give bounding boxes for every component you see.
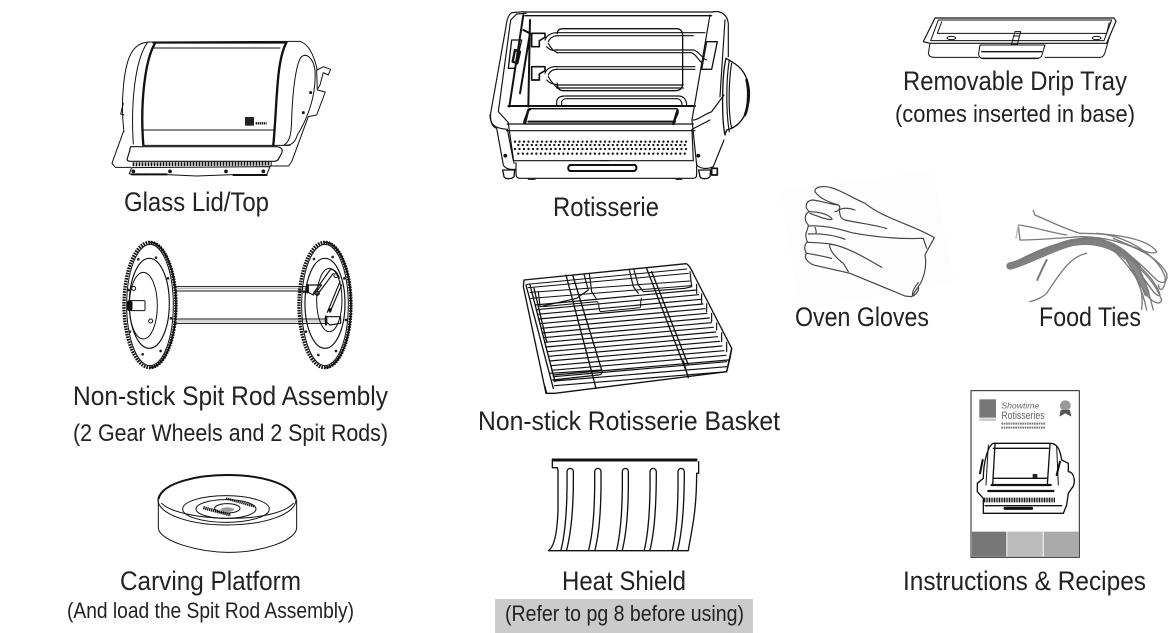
left gear wheel [124, 242, 176, 368]
right gear wheel [299, 242, 351, 368]
title: heat shield: Heat Shield [562, 566, 686, 596]
icon: oven gloves [780, 170, 955, 310]
icon: instruction booklet: Showtime [1001, 400, 1040, 410]
text: spit rod loading note: (And load the Spit Rod Assembly) [67, 598, 354, 623]
text: gear wheels and spit rods: (2 Gear Wheels and 2 Spit Rods) [73, 420, 388, 447]
title: Glass Lid/Top: Glass Lid/Top [124, 187, 269, 217]
icon: rotisserie [490, 12, 749, 179]
callout: refer to page 8 [495, 599, 753, 633]
icon: spit rod assembly [124, 242, 351, 368]
title: Oven Gloves: Oven Gloves [795, 302, 929, 332]
icon: drip tray [923, 18, 1116, 59]
callout: refer to page 8: (Refer to pg 8 before using) [505, 601, 744, 626]
icon: instruction booklet [971, 391, 1079, 557]
icon: food ties [1010, 211, 1167, 310]
icon: heat shield [548, 459, 699, 551]
title: rotisserie basket: Non-stick Rotisserie Basket [478, 406, 780, 436]
title: instructions and recipes: Instructions & Recipes [903, 566, 1146, 596]
title: spit rod assembly: Non-stick Spit Rod Assembly [73, 381, 388, 411]
title: Food Ties: Food Ties [1039, 302, 1141, 332]
icon: rotisserie basket [523, 264, 732, 393]
icon: glass lid [112, 41, 331, 176]
text: comes inserted in base: (comes inserted in base) [895, 101, 1135, 128]
spit rods [176, 287, 327, 323]
icon: instruction booklet: Rotisseries [1001, 410, 1045, 422]
title: carving platform: Carving Platform [120, 566, 301, 596]
title: Rotisserie: Rotisserie [553, 192, 659, 222]
title: Removable Drip Tray: Removable Drip Tray [903, 66, 1127, 96]
icon: carving platform [158, 475, 297, 552]
